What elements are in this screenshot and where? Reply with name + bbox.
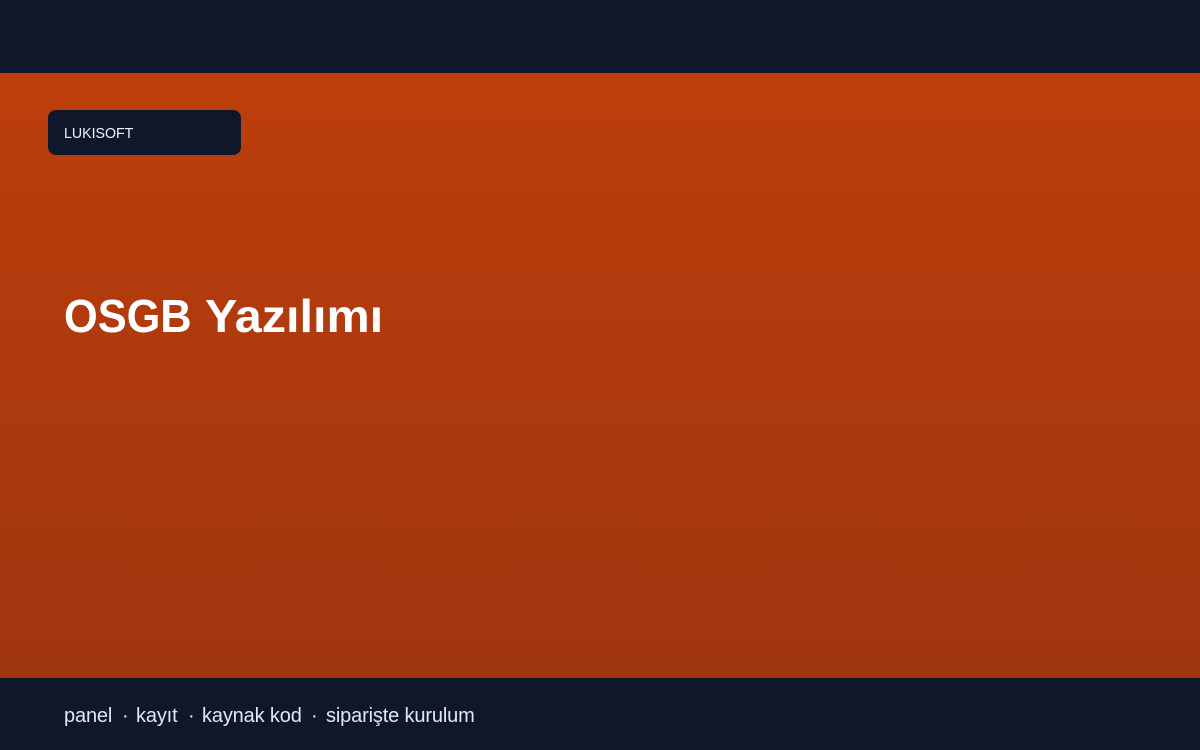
feature list	[64, 705, 475, 727]
feature list: kaynak kod	[202, 705, 302, 727]
feature list: ·	[311, 705, 318, 727]
feature list: panel	[64, 705, 112, 727]
title: OSGB	[64, 290, 192, 342]
title	[64, 290, 383, 342]
brand badge	[48, 110, 241, 155]
feature list: ·	[122, 705, 129, 727]
title: Yazılımı	[205, 290, 383, 342]
feature list: siparişte kurulum	[326, 705, 475, 727]
feature list: kayıt	[136, 705, 178, 727]
brand name: LUKISOFT	[64, 125, 133, 142]
feature list: ·	[188, 705, 195, 727]
top bar	[0, 0, 1200, 73]
bottom bar	[0, 678, 1200, 750]
